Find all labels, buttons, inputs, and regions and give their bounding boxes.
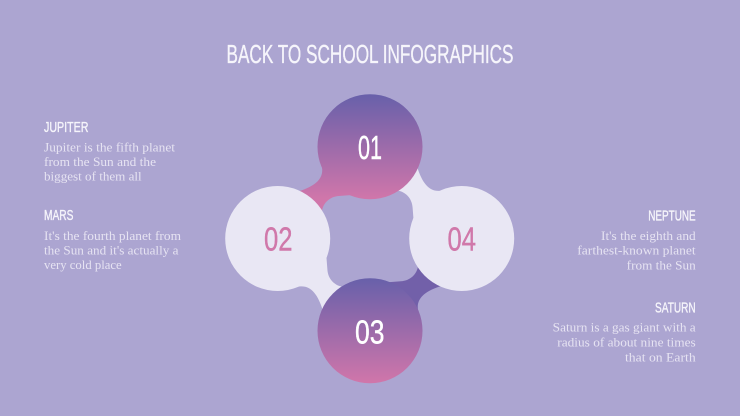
diagram: four connected circles [225,94,514,383]
circle 02 [225,186,330,291]
text block: Saturn: SATURN [655,300,696,316]
text block: Jupiter: biggest of them all [44,170,142,184]
text block: Mars [44,208,181,272]
text block: Jupiter: JUPITER [44,120,88,136]
text block: Neptune: It's the eighth and [601,229,696,243]
text block: Neptune: from the Sun [627,258,696,272]
text block: Saturn: Saturn is a gas giant with a [553,321,696,335]
circle 04 [409,186,514,291]
text block: Mars: very cold place [44,258,122,272]
circle 04: 04 [448,221,476,258]
circle 02: 02 [264,221,292,258]
text block: Neptune: NEPTUNE [648,209,696,225]
title: BACK TO SCHOOL INFOGRAPHICS [226,39,514,69]
connector: 02 to 03 [278,239,369,331]
connector: 03 to 04 [370,239,462,330]
circle 01: 01 [358,129,382,166]
text block: Saturn: that on Earth [625,350,697,364]
connector: 04 to 01 [371,147,462,239]
text block: Jupiter: Jupiter is the fifth planet [44,141,176,155]
connector: 01 to 02 [278,147,370,238]
text block: Mars: It's the fourth planet from [44,229,181,243]
text block: Mars: MARS [44,208,74,224]
text block: Jupiter [44,120,176,184]
text block: Jupiter: from the Sun and the [44,155,156,169]
text block: Saturn [553,300,697,364]
circle 01 [318,94,422,199]
text block: Neptune [577,209,696,272]
text block: Mars: the Sun and it's actually a [44,244,179,258]
text block: Saturn: radius of about nine times [557,336,696,350]
circle 03 [318,278,422,383]
circle 03: 03 [355,313,384,350]
text block: Neptune: farthest-known planet [577,244,696,258]
